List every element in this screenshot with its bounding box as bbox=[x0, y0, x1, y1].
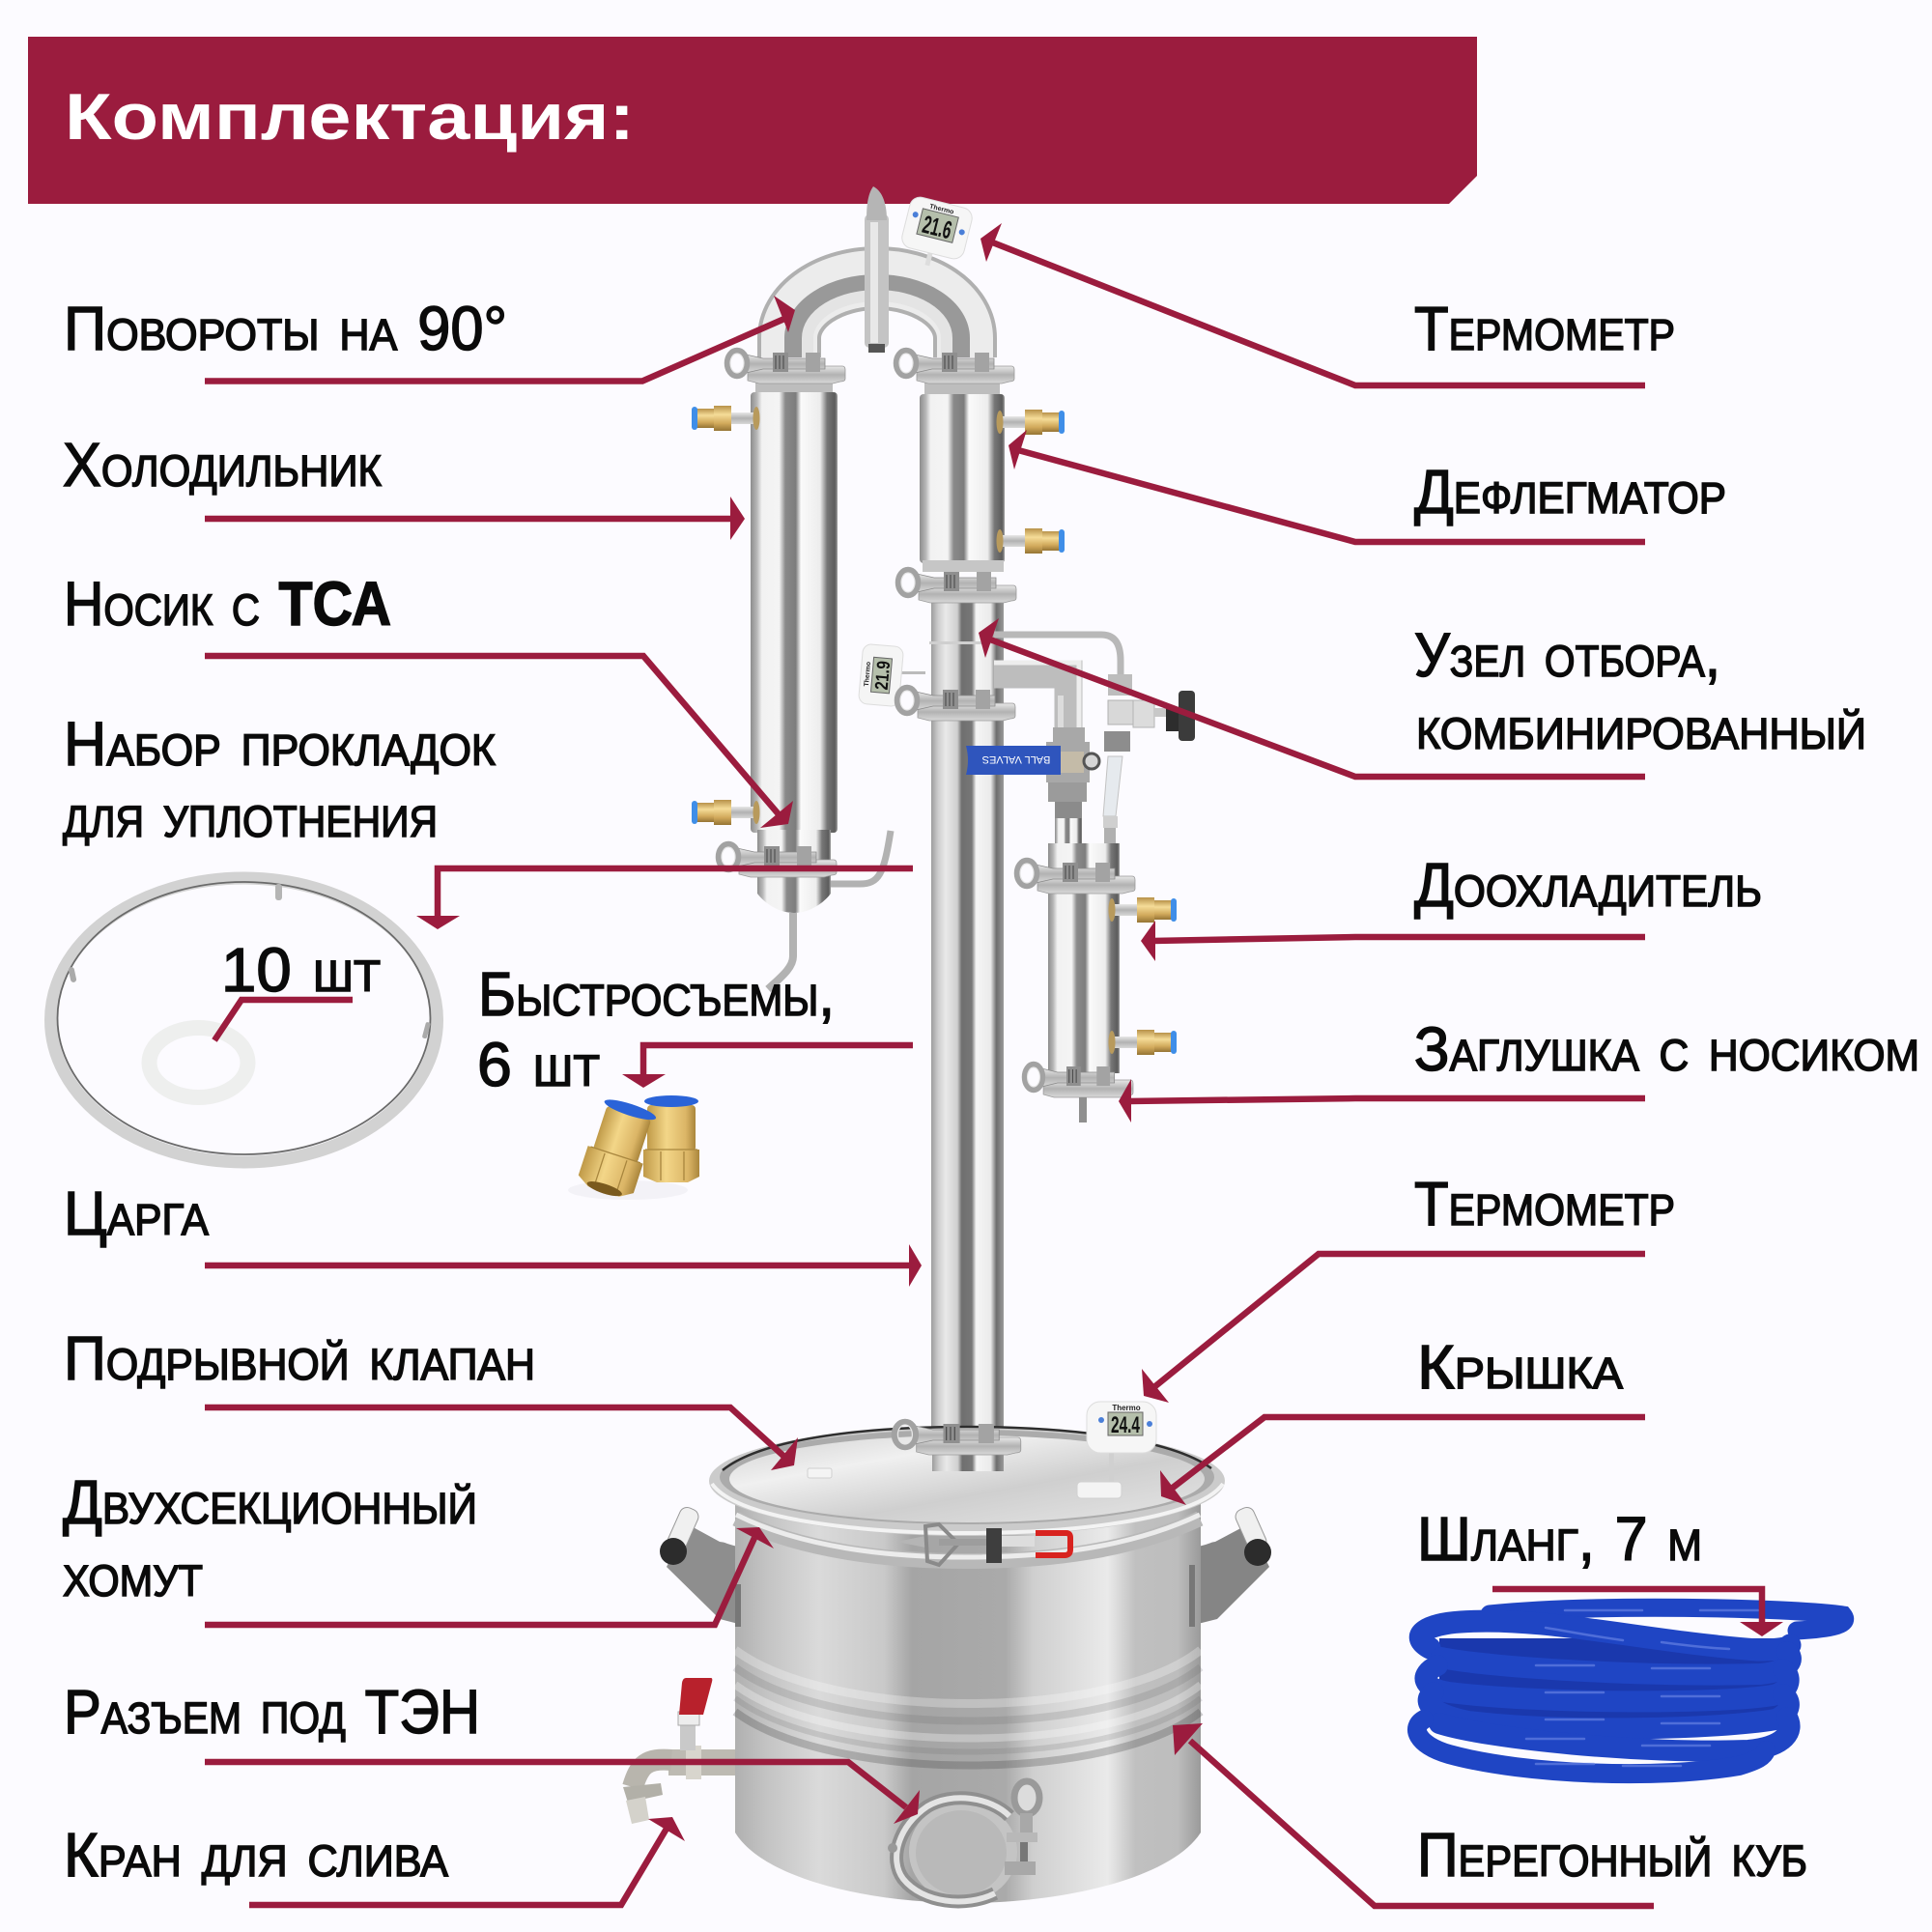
arrow: aftercooler bbox=[1141, 921, 1645, 961]
arrow: plug with nozzle bbox=[1119, 1079, 1645, 1122]
arrow: lid bbox=[1160, 1417, 1645, 1505]
boiler handles bbox=[660, 1505, 1271, 1626]
column thermometer bbox=[858, 643, 925, 707]
boiler pot bbox=[735, 1492, 1201, 1903]
leaders and arrows bbox=[205, 223, 1783, 1906]
aftercooler top clamp bbox=[1017, 861, 1135, 894]
top clamp on bend bbox=[865, 186, 889, 353]
label: boiler: Перегонный куб bbox=[1417, 1820, 1807, 1889]
arrow: hose bbox=[1492, 1589, 1783, 1636]
arrow: column bbox=[205, 1244, 922, 1287]
left condenser tube bbox=[751, 392, 838, 833]
dephlegmator tube bbox=[920, 394, 1005, 563]
main column tube bbox=[931, 599, 1004, 1459]
arrow: take-off unit bbox=[979, 618, 1645, 777]
distillation column assembly bbox=[623, 186, 1271, 1903]
condenser fittings bbox=[692, 406, 759, 431]
top thermometer: 21.6 bbox=[920, 210, 954, 244]
dephlegmator lower collar bbox=[923, 560, 1004, 572]
arrow: drain tap bbox=[249, 1817, 685, 1905]
column thermometer: Thermo bbox=[864, 662, 872, 687]
title banner bbox=[28, 37, 1477, 204]
take-off thin pipe bbox=[994, 635, 1121, 676]
label: bends: Повороты на 90° bbox=[64, 294, 507, 363]
dephlegmator fittings bbox=[997, 410, 1065, 435]
TEN port clamp bbox=[888, 1781, 1039, 1902]
arrow: double clamp bbox=[205, 1527, 774, 1625]
label: drain tap: Кран для слива bbox=[64, 1820, 448, 1889]
double clamp band bbox=[736, 1515, 1200, 1561]
tilted fitting bbox=[576, 1095, 660, 1203]
labels left column bbox=[63, 294, 835, 1889]
column mid clamp bbox=[897, 688, 1015, 721]
label: quick connectors line 2: 6 шт bbox=[477, 1030, 600, 1099]
aftercooler tube bbox=[1048, 843, 1120, 1073]
ball valve body bbox=[1053, 727, 1085, 742]
upright fitting bbox=[643, 1095, 699, 1182]
label: lid: Крышка bbox=[1417, 1332, 1623, 1402]
TCA side outlet bbox=[831, 831, 891, 884]
upper ring on column bbox=[929, 641, 1001, 644]
title: Комплектация: bbox=[65, 80, 635, 154]
arrow: thermometer boiler bbox=[1142, 1254, 1645, 1403]
label: quick connectors line 1: Быстросъемы, bbox=[478, 959, 835, 1029]
column base clamp bbox=[895, 1422, 1021, 1455]
arrow: dephlegmator bbox=[1009, 430, 1645, 542]
small white gasket bbox=[149, 1028, 247, 1097]
top thermometer bbox=[896, 195, 975, 273]
condenser top clamp bbox=[727, 351, 845, 384]
U-bend with 90 degree turns bbox=[789, 278, 965, 357]
label: thermometer boiler: Термометр bbox=[1414, 1169, 1675, 1238]
arrow: heater port bbox=[205, 1762, 920, 1824]
label: burst valve: Подрывной клапан bbox=[64, 1323, 535, 1393]
label: column section: Царга bbox=[64, 1179, 209, 1248]
lid latch bbox=[896, 1524, 1070, 1565]
label: gasket kit line 2: для уплотнения bbox=[63, 781, 438, 850]
arrow: condenser bbox=[205, 497, 745, 540]
quick-release fittings bbox=[568, 1095, 699, 1203]
take-off branch pipe bbox=[994, 663, 1099, 845]
labels right column bbox=[1414, 294, 1919, 1889]
arrow: quick connectors bbox=[622, 1045, 913, 1088]
column thermometer: 21.9 bbox=[872, 660, 895, 691]
arrow: bends bbox=[205, 296, 795, 381]
needle valve assembly bbox=[1103, 674, 1195, 844]
drain tap bbox=[623, 1678, 735, 1824]
label: nozzle with TCA: Носик с ТСА bbox=[64, 569, 391, 639]
label: aftercooler: Доохладитель bbox=[1414, 850, 1762, 920]
label: take-off unit line 2: комбинированный bbox=[1416, 693, 1866, 762]
label: hose: Шланг, 7 м bbox=[1417, 1504, 1702, 1574]
arrow: nozzle bbox=[205, 656, 793, 828]
hose coil bbox=[1417, 1607, 1845, 1774]
arrow: burst valve bbox=[205, 1407, 798, 1470]
blue valve handle: BALL VALVES bbox=[982, 753, 1050, 765]
dephlegmator collar bbox=[924, 379, 1000, 396]
aftercooler bottom clamp and nozzle bbox=[1025, 1065, 1133, 1122]
label: double clamp line 2: хомут bbox=[63, 1540, 203, 1609]
label: take-off unit line 1: Узел отбора, bbox=[1414, 620, 1720, 690]
top thermometer: Thermo bbox=[928, 204, 954, 216]
boiler thermometer bbox=[1087, 1402, 1156, 1482]
boiler thermometer: 24.4 bbox=[1111, 1412, 1140, 1438]
label: double clamp line 1: Двухсекционный bbox=[63, 1467, 477, 1537]
label: gasket kit line 1: Набор прокладок bbox=[64, 709, 496, 779]
dephlegmator top clamp bbox=[896, 351, 1014, 384]
label: thermometer top: Термометр bbox=[1414, 294, 1675, 363]
label: heater port: Разъем под ТЭН bbox=[64, 1677, 480, 1747]
condenser bottom nozzle bbox=[768, 913, 793, 989]
arrow: gasket kit bbox=[416, 868, 913, 929]
label: condenser: Холодильник bbox=[63, 430, 382, 499]
boiler thermometer: Thermo bbox=[1112, 1404, 1141, 1412]
left condenser collar bbox=[755, 379, 833, 394]
condenser bottom clamp bbox=[719, 844, 837, 877]
boiler lid bbox=[709, 1426, 1225, 1536]
gasket kit: large clamp ring and small gasket bbox=[50, 878, 437, 1162]
dephlegmator lower clamp bbox=[898, 570, 1016, 603]
aftercooler fittings bbox=[1109, 897, 1177, 923]
label: 10 pieces: 10 шт bbox=[221, 935, 381, 1005]
arrow: boiler bbox=[1173, 1723, 1654, 1906]
leader: 10 pieces bbox=[214, 1000, 353, 1040]
label: dephlegmator: Дефлегматор bbox=[1414, 457, 1726, 526]
blue valve handle bbox=[966, 746, 1061, 775]
arrow: thermometer top bbox=[980, 223, 1645, 385]
condenser bottom cup bbox=[757, 830, 831, 913]
